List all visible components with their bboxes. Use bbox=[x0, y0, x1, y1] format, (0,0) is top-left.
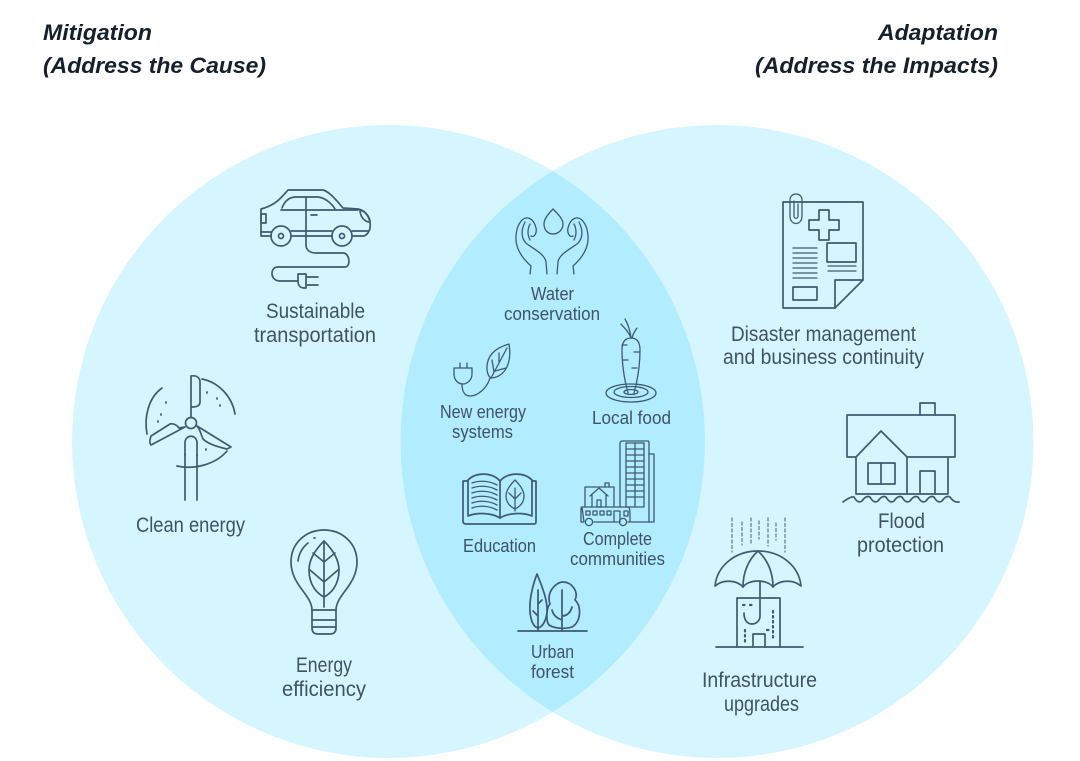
label: water conservation: Water bbox=[531, 283, 574, 304]
label: disaster management and business continuity: and business continuity bbox=[723, 346, 924, 369]
label: water conservation: conservation bbox=[504, 303, 600, 324]
label: education: Education bbox=[463, 535, 536, 556]
label: new energy systems: New energy bbox=[440, 401, 527, 422]
icon: urban forest trees bbox=[518, 574, 587, 631]
label: disaster management and business continuity: Disaster management bbox=[731, 323, 916, 346]
icon: open book with leaf bbox=[463, 474, 536, 524]
icon: wind turbine bbox=[146, 376, 235, 500]
label: urban forest: forest bbox=[531, 661, 574, 682]
label: water conservation bbox=[504, 283, 600, 324]
label: sustainable transportation: transportation bbox=[254, 324, 376, 347]
label: disaster management and business continuity bbox=[723, 323, 924, 369]
icon: umbrella over building bbox=[715, 518, 803, 647]
heading: mitigation bbox=[43, 20, 266, 78]
icon: city building, house and bus bbox=[581, 441, 654, 526]
heading: adaptation bbox=[755, 20, 998, 78]
label: clean energy: Clean energy bbox=[136, 514, 245, 537]
label: local food: Local food bbox=[592, 407, 671, 428]
label: flood protection: Flood bbox=[878, 510, 925, 533]
icon: carrot bbox=[606, 319, 656, 402]
label: energy efficiency bbox=[282, 654, 366, 701]
label: urban forest bbox=[531, 641, 574, 682]
label: new energy systems: systems bbox=[452, 421, 513, 442]
label: infrastructure upgrades: upgrades bbox=[724, 693, 799, 716]
heading: adaptation: Adaptation bbox=[877, 20, 998, 45]
heading: adaptation: (Address the Impacts) bbox=[755, 53, 998, 78]
label: energy efficiency: efficiency bbox=[282, 678, 366, 701]
icon: house on water bbox=[843, 403, 959, 502]
circle: mitigation bbox=[72, 125, 705, 758]
icon: light bulb with leaf bbox=[291, 530, 357, 634]
label: infrastructure upgrades bbox=[702, 669, 817, 716]
label: complete communities: Complete bbox=[583, 528, 652, 549]
label: complete communities bbox=[570, 528, 665, 569]
label: complete communities: communities bbox=[570, 548, 665, 569]
circle: adaptation bbox=[400, 125, 1034, 758]
icon: electric car bbox=[261, 190, 370, 288]
heading: mitigation: Mitigation bbox=[43, 20, 152, 45]
heading: mitigation: (Address the Cause) bbox=[43, 53, 266, 78]
label: sustainable transportation bbox=[254, 300, 376, 347]
icon: medical document bbox=[783, 194, 863, 308]
overlap: mitigation and adaptation bbox=[401, 171, 705, 712]
label: sustainable transportation: Sustainable bbox=[266, 300, 365, 323]
icon: plug and leaf bbox=[454, 344, 510, 396]
label: new energy systems bbox=[440, 401, 527, 442]
label: infrastructure upgrades: Infrastructure bbox=[702, 669, 817, 692]
icon: hands and water drop bbox=[516, 209, 588, 274]
label: energy efficiency: Energy bbox=[296, 654, 352, 677]
label: flood protection: protection bbox=[857, 534, 944, 557]
label: urban forest: Urban bbox=[531, 641, 574, 662]
label: flood protection bbox=[857, 510, 944, 557]
